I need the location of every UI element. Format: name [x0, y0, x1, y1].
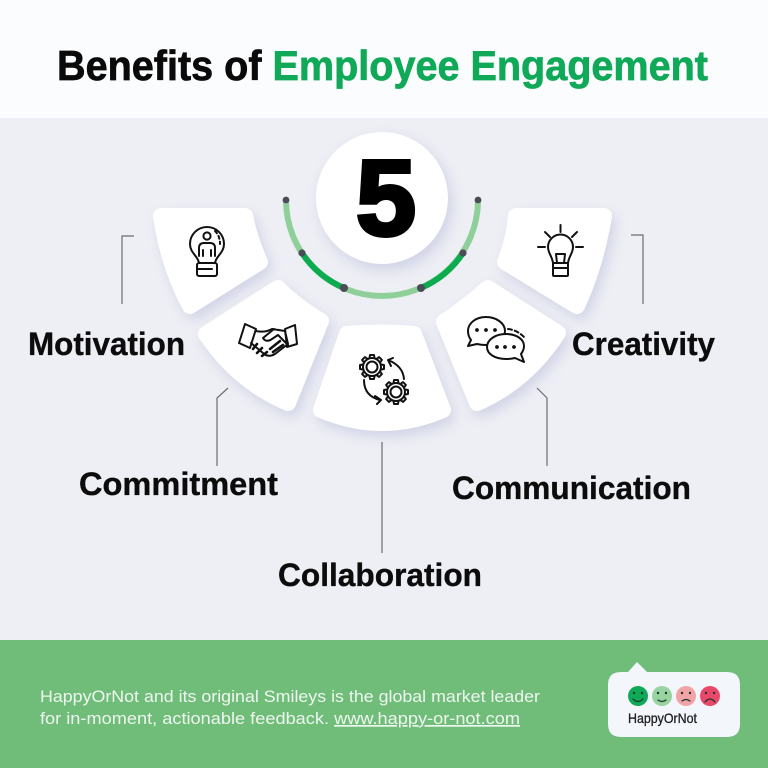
- footer text: for in-moment, actionable feedback. www.happy-or-not.com: [40, 709, 520, 728]
- icon: gears with arrows: [360, 355, 408, 404]
- label: communication: Communication: [452, 470, 691, 506]
- progress arc: [283, 197, 481, 296]
- icon: handshake: [239, 324, 297, 356]
- panel: creativity card: [505, 216, 604, 306]
- panel: collaboration card: [321, 332, 443, 423]
- logo: HappyOrNot: HappyOrNot: [628, 710, 697, 726]
- footer band: [0, 640, 768, 768]
- icon: chat bubbles: [468, 317, 524, 362]
- icon: person in bulb: [190, 227, 224, 276]
- panel: commitment card: [206, 288, 321, 403]
- icon: light bulb: [538, 225, 583, 276]
- number badge: [316, 132, 448, 264]
- leader line: creativity: [631, 235, 643, 304]
- label: creativity: Creativity: [572, 326, 715, 362]
- number badge: 5: [356, 137, 416, 258]
- leader line: collaboration: [381, 442, 383, 553]
- leader line: commitment: [217, 388, 228, 466]
- leader line: communication: [537, 388, 547, 466]
- logo: HappyOrNot: [608, 662, 740, 737]
- panel: communication card: [444, 288, 558, 403]
- footer text: HappyOrNot and its original Smileys is the global market leader: [40, 687, 540, 706]
- leader line: motivation: [122, 236, 134, 304]
- label: collaboration: Collaboration: [278, 557, 482, 593]
- title: Benefits of Employee Engagement: [57, 42, 708, 89]
- label: commitment: Commitment: [79, 466, 278, 502]
- footer text: [40, 687, 540, 728]
- label: motivation: Motivation: [28, 326, 185, 362]
- panel: motivation card: [161, 216, 260, 306]
